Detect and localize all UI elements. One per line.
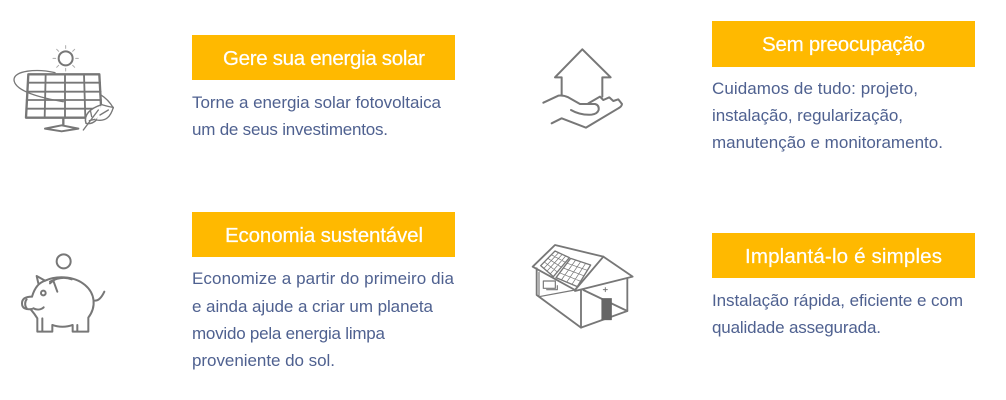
description: um de seus investimentos. bbox=[192, 120, 388, 139]
heading bar bbox=[712, 21, 975, 67]
description: instalação, regularização, bbox=[712, 106, 903, 125]
heading bar bbox=[712, 233, 975, 278]
description: Instalação rápida, eficiente e com bbox=[712, 291, 963, 310]
description: proveniente do sol. bbox=[192, 351, 335, 370]
description bbox=[712, 291, 963, 337]
icon: house held in hand bbox=[543, 49, 622, 128]
heading: Sem preocupação bbox=[762, 33, 925, 56]
panel: implantá-lo é simples bbox=[533, 233, 975, 337]
description: e ainda ajude a criar um planeta bbox=[192, 297, 434, 316]
heading bar bbox=[192, 35, 455, 80]
description: Torne a energia solar fotovoltaica bbox=[192, 93, 442, 112]
panel: gere sua energia solar bbox=[14, 35, 455, 139]
heading: Gere sua energia solar bbox=[223, 47, 425, 70]
heading bar bbox=[192, 212, 455, 257]
description: qualidade assegurada. bbox=[712, 318, 881, 337]
description: Economize a partir do primeiro dia bbox=[192, 269, 455, 288]
description bbox=[192, 93, 442, 139]
description: Cuidamos de tudo: projeto, bbox=[712, 79, 918, 98]
description bbox=[712, 79, 943, 152]
icon: piggy bank with coin bbox=[22, 254, 104, 332]
description: manutenção e monitoramento. bbox=[712, 133, 943, 152]
panel: economia sustentável bbox=[22, 212, 455, 370]
description: movido pela energia limpa bbox=[192, 324, 386, 343]
heading: Implantá-lo é simples bbox=[745, 245, 942, 268]
description bbox=[192, 269, 455, 370]
icon: solar panel with sun and leaf bbox=[14, 46, 113, 131]
heading: Economia sustentável bbox=[225, 224, 423, 247]
panel: sem preocupação bbox=[543, 21, 975, 152]
icon: house with rooftop solar panels bbox=[533, 245, 633, 328]
